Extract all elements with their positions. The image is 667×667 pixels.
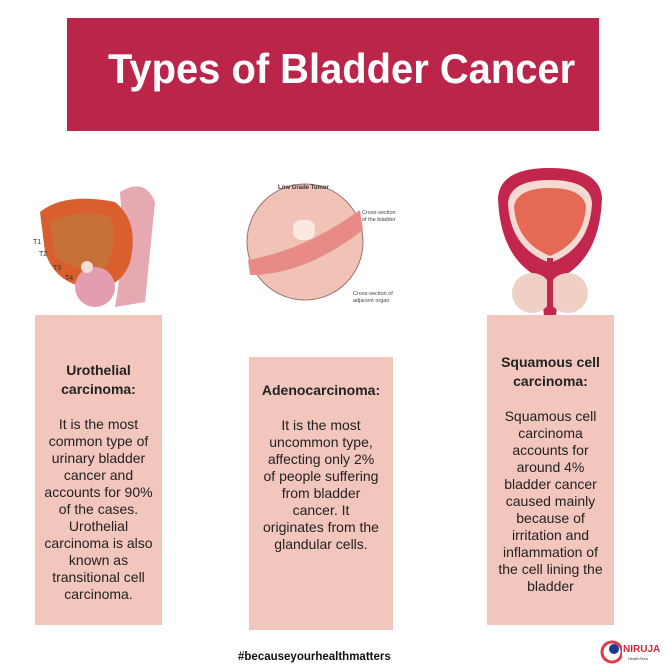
illustration: bladder with tumor stages: T4 xyxy=(65,275,73,282)
illustration: bladder with tumor stages: T1 xyxy=(33,239,41,246)
text: It is the most common type of urinary bladder cancer and accounts for 90% of the cases. Urothelial carcinoma is also known as transitional cell carcinoma. xyxy=(44,416,153,602)
illustration: cross-section circle: Low Grade Tumor xyxy=(278,185,330,191)
illustration: bladder with tumor stages: T3 xyxy=(53,265,61,272)
text: Squamous cell carcinoma accounts for around 4% bladder cancer caused mainly because of irritation and inflammation of the cell lining the bladder xyxy=(498,408,603,594)
title: Types of Bladder Cancer xyxy=(108,45,575,92)
illustration: bladder with tumor stages: T2 xyxy=(39,251,47,258)
panel: adenocarcinoma xyxy=(249,357,393,630)
illustration: cross-section circle: adjacent organ xyxy=(353,298,389,304)
illustration: cross-section circle xyxy=(246,184,396,304)
illustration: bladder with tumor stages xyxy=(33,186,155,307)
heading: Adenocarcinoma: xyxy=(262,382,380,398)
logo xyxy=(600,640,660,664)
panel: urothelial xyxy=(35,315,162,625)
logo: NIRUJA xyxy=(623,644,660,655)
illustration: cross-section circle: Cross-section of xyxy=(353,291,393,297)
illustration: bladder cross-section xyxy=(498,168,602,315)
text: It is the most uncommon type, affecting only 2% of people suffering from bladder cancer. It originates from the glandular cells. xyxy=(263,417,379,552)
logo: HealthTech xyxy=(628,656,648,661)
hashtag: #becauseyourhealthmatters xyxy=(238,651,391,663)
illustration: cross-section circle: Cross-section xyxy=(362,210,396,216)
illustration: cross-section circle: of the bladder xyxy=(362,217,396,223)
panel: squamous xyxy=(487,315,614,625)
title banner xyxy=(67,18,599,131)
heading: Squamous cell carcinoma: xyxy=(501,354,600,389)
heading: Urothelial carcinoma: xyxy=(61,362,136,397)
